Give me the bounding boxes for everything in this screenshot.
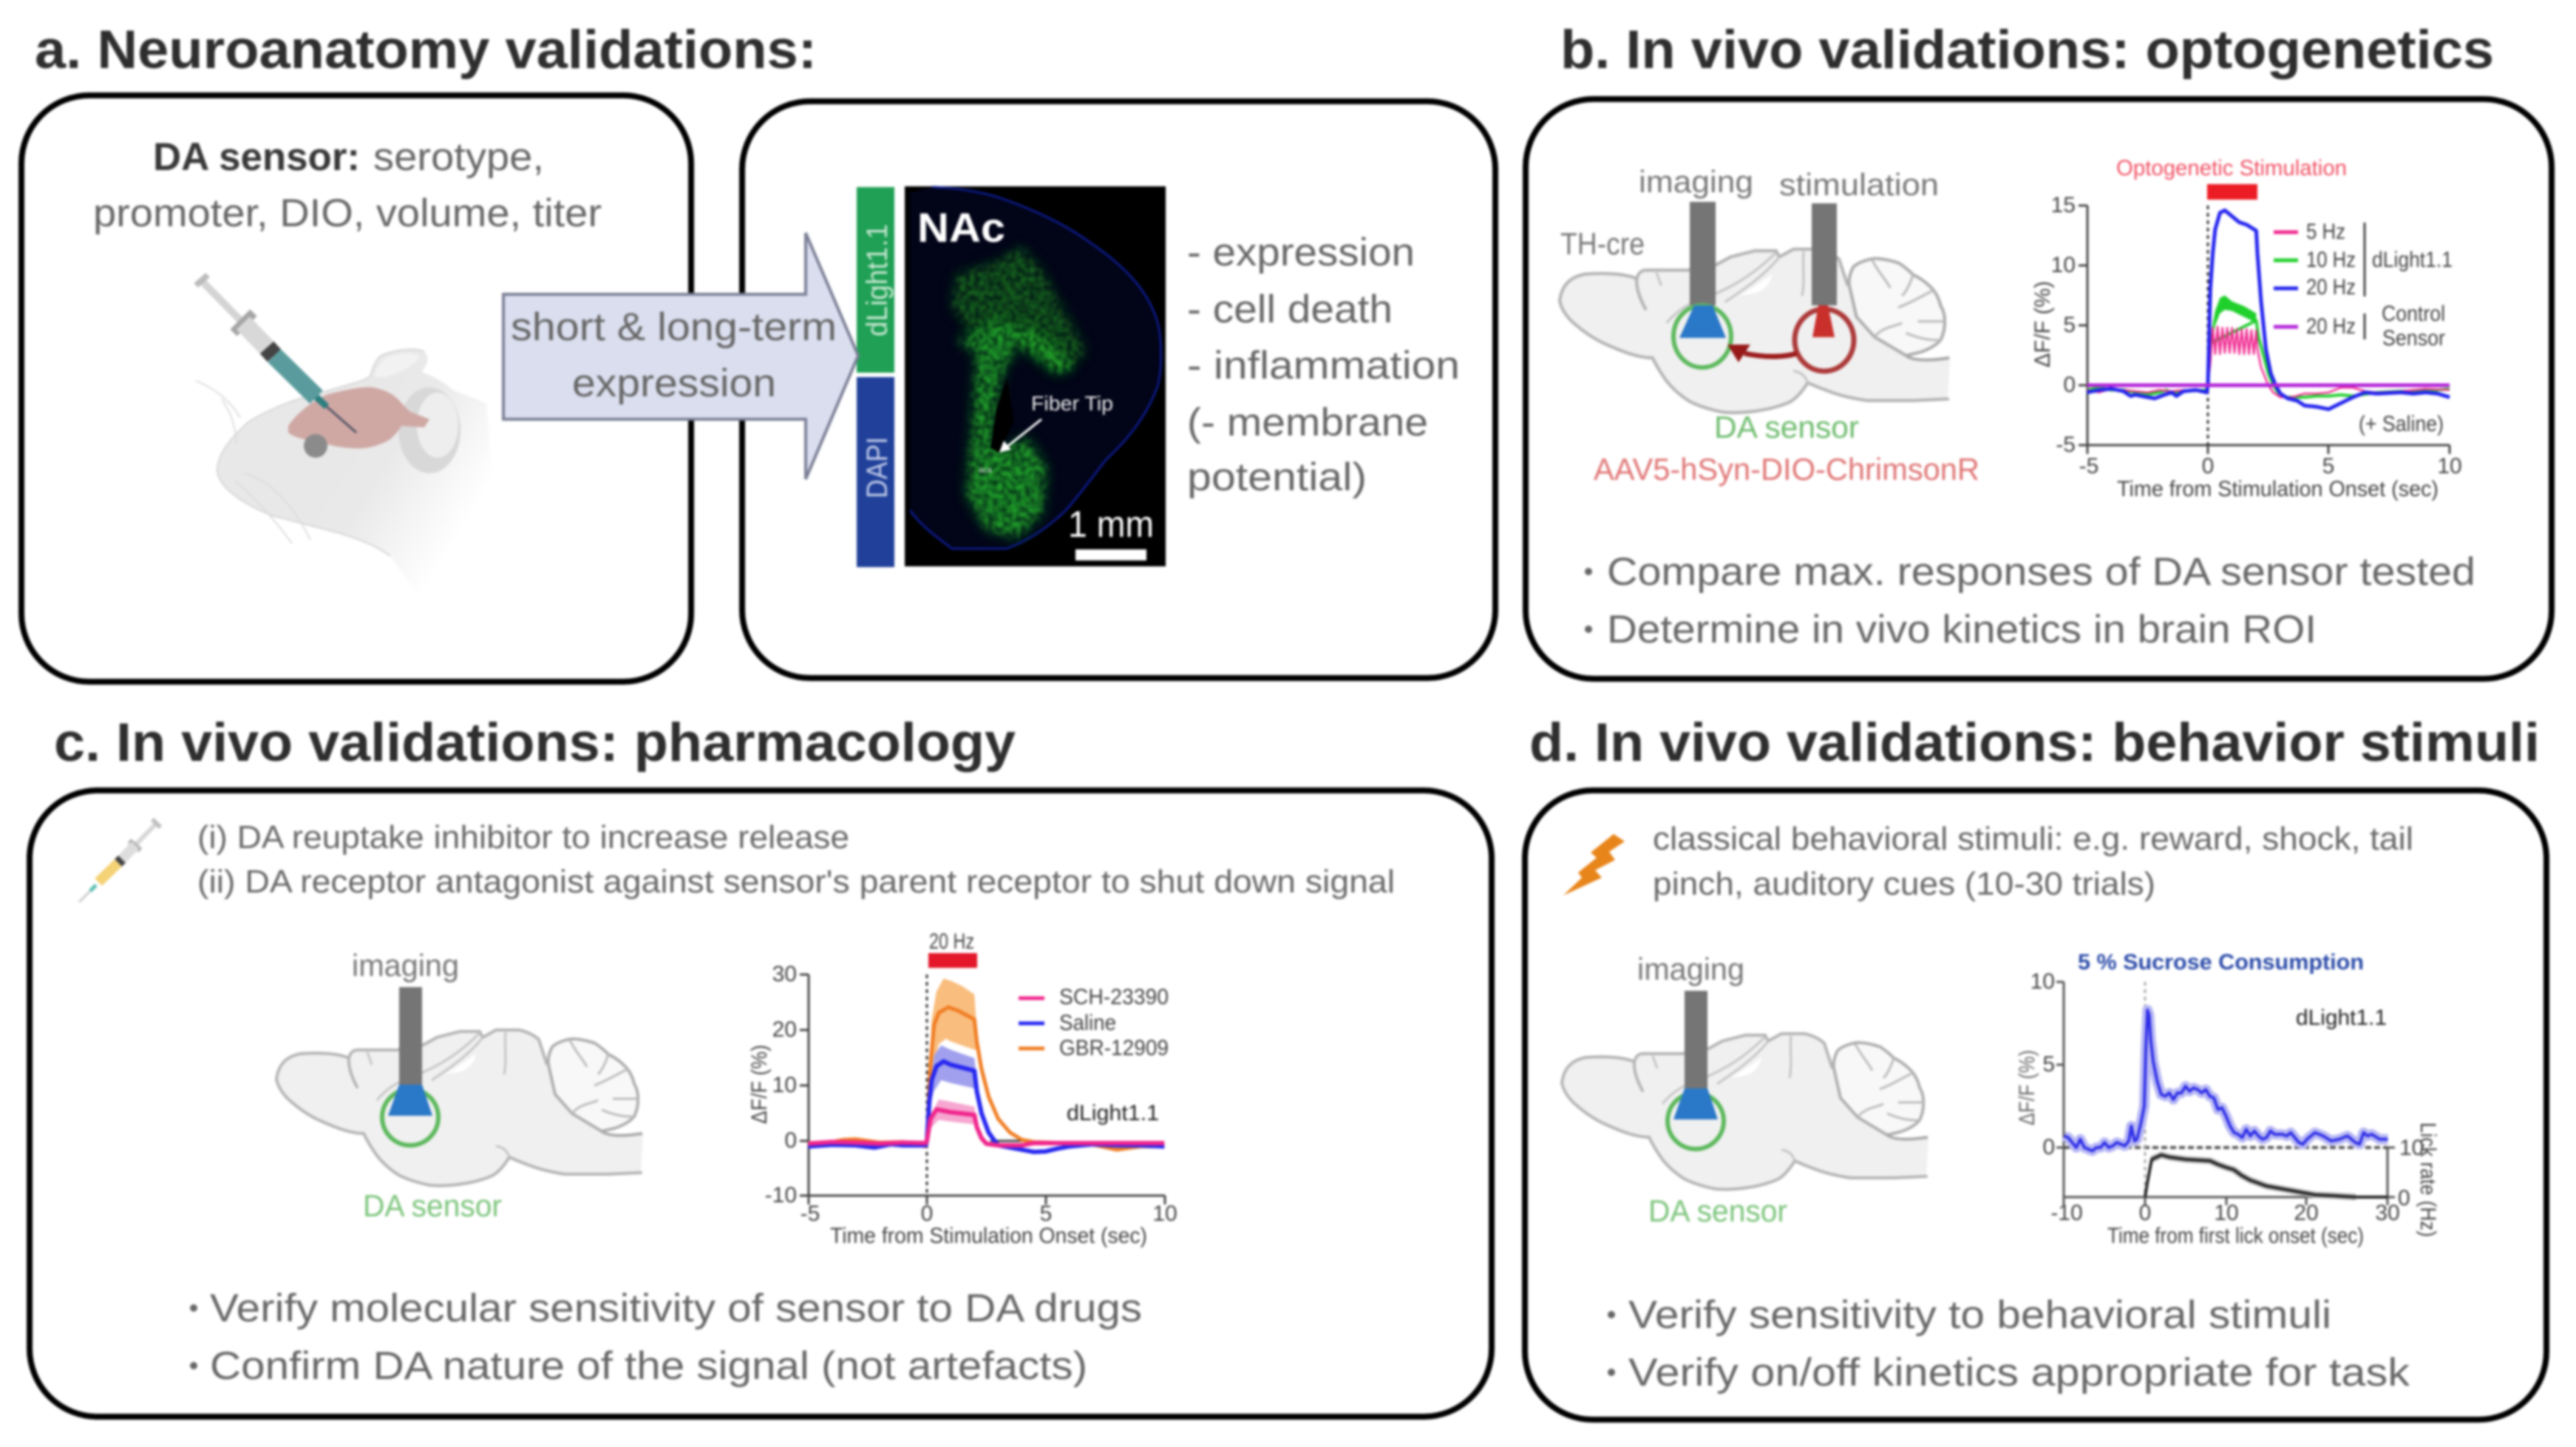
- chart: drug response: -5: [801, 1202, 820, 1226]
- text: DA sensor parameters: DA sensor:: [153, 135, 360, 179]
- chart: drug response: dLight1.1: [1067, 1101, 1159, 1125]
- text: behavioral stimuli description: pinch, auditory cues (10-30 trials): [1653, 866, 2155, 902]
- chart: drug response: 20: [772, 1017, 797, 1042]
- panel: viral injection: [21, 95, 691, 682]
- chart: drug response: GBR-12909: [1059, 1036, 1169, 1060]
- chart: sucrose consumption response: Lick rate (Hz): [2416, 1122, 2440, 1237]
- chart: sucrose consumption response: Time from first lick onset (sec): [2107, 1224, 2364, 1248]
- diagram: brain with imaging fiber: DA sensor: [1648, 1193, 1787, 1228]
- arrow: short and long-term expression: expression: [572, 362, 776, 405]
- text: optogenetics bullets: Compare max. responses of DA sensor tested: [1607, 550, 2475, 594]
- heading: panel b: b. In vivo validations: optogenetics: [1560, 20, 2494, 80]
- arrow: short and long-term expression: short & long-term: [511, 305, 837, 349]
- label: fiber tip with arrow: Fiber Tip: [1031, 392, 1113, 415]
- chart: optogenetic stimulation response: 10: [2437, 454, 2462, 478]
- text: histology checklist: - cell death: [1187, 288, 1393, 331]
- chart: drug response: -10: [765, 1183, 797, 1207]
- chart: optogenetic stimulation response: ΔF/F (%): [2030, 281, 2055, 367]
- text: optogenetics bullets: Determine in vivo kinetics in brain ROI: [1607, 608, 2317, 651]
- text: histology checklist: - expression: [1187, 231, 1415, 274]
- text: DA sensor parameters: serotype,: [373, 135, 544, 179]
- panel: behavior stimuli: [1525, 790, 2546, 1420]
- text: behavioral stimuli description: classical behavioral stimuli: e.g. reward, shock, tail: [1653, 821, 2413, 857]
- chart: optogenetic stimulation response: 5 Hz: [2306, 220, 2345, 244]
- text: behavior bullets: Verify sensitivity to behavioral stimuli: [1628, 1293, 2331, 1337]
- heading: panel c: c. In vivo validations: pharmacology: [54, 713, 1016, 773]
- image: brain section micrograph: [905, 186, 1166, 566]
- chart: optogenetic stimulation response: 20 Hz: [2306, 275, 2356, 299]
- chart: drug response: 30: [772, 962, 797, 986]
- chart: drug response: 5: [1040, 1202, 1052, 1226]
- text: histology checklist: [1187, 231, 1460, 499]
- chart: optogenetic stimulation response: -5: [2056, 433, 2076, 457]
- text: optogenetics bullets: [1585, 550, 2475, 651]
- heading: panel a: a. Neuroanatomy validations:: [35, 20, 817, 80]
- icon: lightning bolt: [1563, 834, 1625, 895]
- chart: sucrose consumption response: 10: [2399, 1136, 2424, 1160]
- text: drug description: [197, 819, 1395, 900]
- icon: mouse head with brain and syringe: [196, 275, 492, 596]
- chart: sucrose consumption response: 0: [2042, 1135, 2055, 1159]
- chart: optogenetic stimulation response: -5: [2079, 454, 2098, 478]
- text: behavioral stimuli description: [1653, 821, 2413, 902]
- text: pharmacology bullets: Verify molecular sensitivity of sensor to DA drugs: [210, 1287, 1142, 1330]
- chart: sucrose consumption response: dLight1.1: [2296, 1006, 2387, 1030]
- diagram: brain with imaging and stimulation fibers: TH-cre: [1560, 226, 1645, 261]
- chart: sucrose consumption response: 0: [2139, 1201, 2151, 1225]
- diagram: brain with imaging fiber: imaging: [1637, 952, 1744, 986]
- label: fiber tip with arrow: [979, 392, 1113, 475]
- panel: optogenetics: [1526, 99, 2552, 679]
- chart: drug response: [747, 929, 1177, 1248]
- chart: drug response: 10: [1152, 1202, 1177, 1226]
- chart: optogenetic stimulation response: 5: [2063, 313, 2076, 337]
- diagram: brain with imaging and stimulation fibers: stimulation: [1779, 167, 1939, 202]
- chart: sucrose consumption response: 0: [2398, 1186, 2410, 1210]
- diagram: brain with imaging and stimulation fibers: [1560, 164, 1979, 487]
- chart: optogenetic stimulation response: 10 Hz: [2306, 248, 2356, 272]
- chart: sucrose consumption response: 5 % Sucrose Consumption: [2078, 950, 2364, 975]
- chart: drug response: 0: [921, 1202, 933, 1226]
- diagram: brain with imaging and stimulation fibers: DA sensor: [1714, 410, 1859, 444]
- scale bar: 1 mm: 1 mm: [1068, 504, 1154, 545]
- label: dLight1.1 bar: [857, 187, 894, 373]
- label: dLight1.1 bar: dLight1.1: [861, 224, 894, 336]
- diagram: brain with imaging fiber: imaging: [352, 948, 459, 983]
- chart: optogenetic stimulation response: 0: [2202, 454, 2214, 478]
- text: DA sensor parameters: [93, 135, 602, 235]
- diagram: brain with imaging fiber: [276, 948, 643, 1223]
- label: DAPI bar: [857, 377, 894, 567]
- chart: sucrose consumption response: 30: [2375, 1201, 2400, 1225]
- chart: drug response: Saline: [1059, 1011, 1116, 1035]
- label: DAPI bar: DAPI: [861, 437, 894, 498]
- chart: sucrose consumption response: 20: [2294, 1201, 2319, 1225]
- text: behavior bullets: Verify on/off kinetics appropriate for task: [1628, 1351, 2410, 1395]
- chart: sucrose consumption response: 5: [2042, 1052, 2055, 1077]
- chart: optogenetic stimulation response: 5: [2322, 454, 2334, 478]
- scale bar: 1 mm: [1068, 504, 1154, 560]
- chart: sucrose consumption response: ΔF/F (%): [2015, 1050, 2039, 1125]
- chart: optogenetic stimulation response: dLight1.1: [2372, 248, 2453, 272]
- chart: sucrose consumption response: 10: [2214, 1201, 2239, 1225]
- text: pharmacology bullets: Confirm DA nature of the signal (not artefacts): [210, 1344, 1087, 1388]
- chart: sucrose consumption response: 10: [2030, 969, 2055, 994]
- label: fiber tip with arrow: aca: [979, 466, 993, 475]
- text: drug description: (i) DA reuptake inhibitor to increase release: [197, 819, 849, 855]
- chart: drug response: 0: [784, 1128, 797, 1153]
- chart: optogenetic stimulation response: 15: [2051, 193, 2076, 217]
- chart: optogenetic stimulation response: Time from Stimulation Onset (sec): [2117, 477, 2439, 501]
- label: NAc: NAc: [917, 204, 1005, 251]
- text: drug description: (ii) DA receptor antagonist against sensor's parent receptor to shut down signal: [197, 864, 1395, 900]
- chart: drug response: 20 Hz: [929, 929, 974, 954]
- chart: sucrose consumption response: -10: [2050, 1201, 2083, 1225]
- text: behavior bullets: [1608, 1293, 2410, 1395]
- text: histology checklist: - inflammation: [1187, 344, 1460, 387]
- arrow: short and long-term expression: [503, 233, 858, 479]
- diagram: brain with imaging fiber: DA sensor: [363, 1188, 502, 1223]
- icon: drug syringe: [79, 819, 160, 902]
- text: DA sensor parameters: promoter, DIO, volume, titer: [93, 192, 602, 235]
- chart: optogenetic stimulation response: 10: [2051, 253, 2076, 277]
- panel: pharmacology: [30, 790, 1492, 1417]
- text: histology checklist: potential): [1187, 455, 1367, 499]
- chart: optogenetic stimulation response: [2030, 156, 2462, 501]
- chart: drug response: ΔF/F (%): [747, 1045, 772, 1124]
- heading: panel d: d. In vivo validations: behavior stimuli: [1529, 713, 2540, 773]
- diagram: brain with imaging and stimulation fibers: imaging: [1639, 164, 1753, 199]
- diagram: brain with imaging fiber: [1562, 952, 1928, 1228]
- chart: optogenetic stimulation response: Sensor: [2382, 326, 2445, 350]
- panel: expression histology: [742, 101, 1495, 678]
- chart: drug response: Time from Stimulation Onset (sec): [830, 1224, 1147, 1248]
- text: histology checklist: (- membrane: [1187, 401, 1428, 444]
- chart: optogenetic stimulation response: (+ Saline): [2359, 412, 2444, 436]
- chart: optogenetic stimulation response: 20 Hz: [2306, 314, 2356, 339]
- chart: optogenetic stimulation response: Control: [2382, 302, 2445, 326]
- text: pharmacology bullets: [190, 1287, 1142, 1388]
- chart: drug response: SCH-23390: [1059, 985, 1169, 1009]
- chart: drug response: 10: [772, 1073, 797, 1097]
- diagram: brain with imaging and stimulation fibers: AAV5-hSyn-DIO-ChrimsonR: [1594, 452, 1979, 487]
- chart: optogenetic stimulation response: Optogenetic Stimulation: [2116, 156, 2347, 180]
- chart: sucrose consumption response: [2015, 950, 2440, 1248]
- chart: optogenetic stimulation response: 0: [2063, 373, 2076, 397]
